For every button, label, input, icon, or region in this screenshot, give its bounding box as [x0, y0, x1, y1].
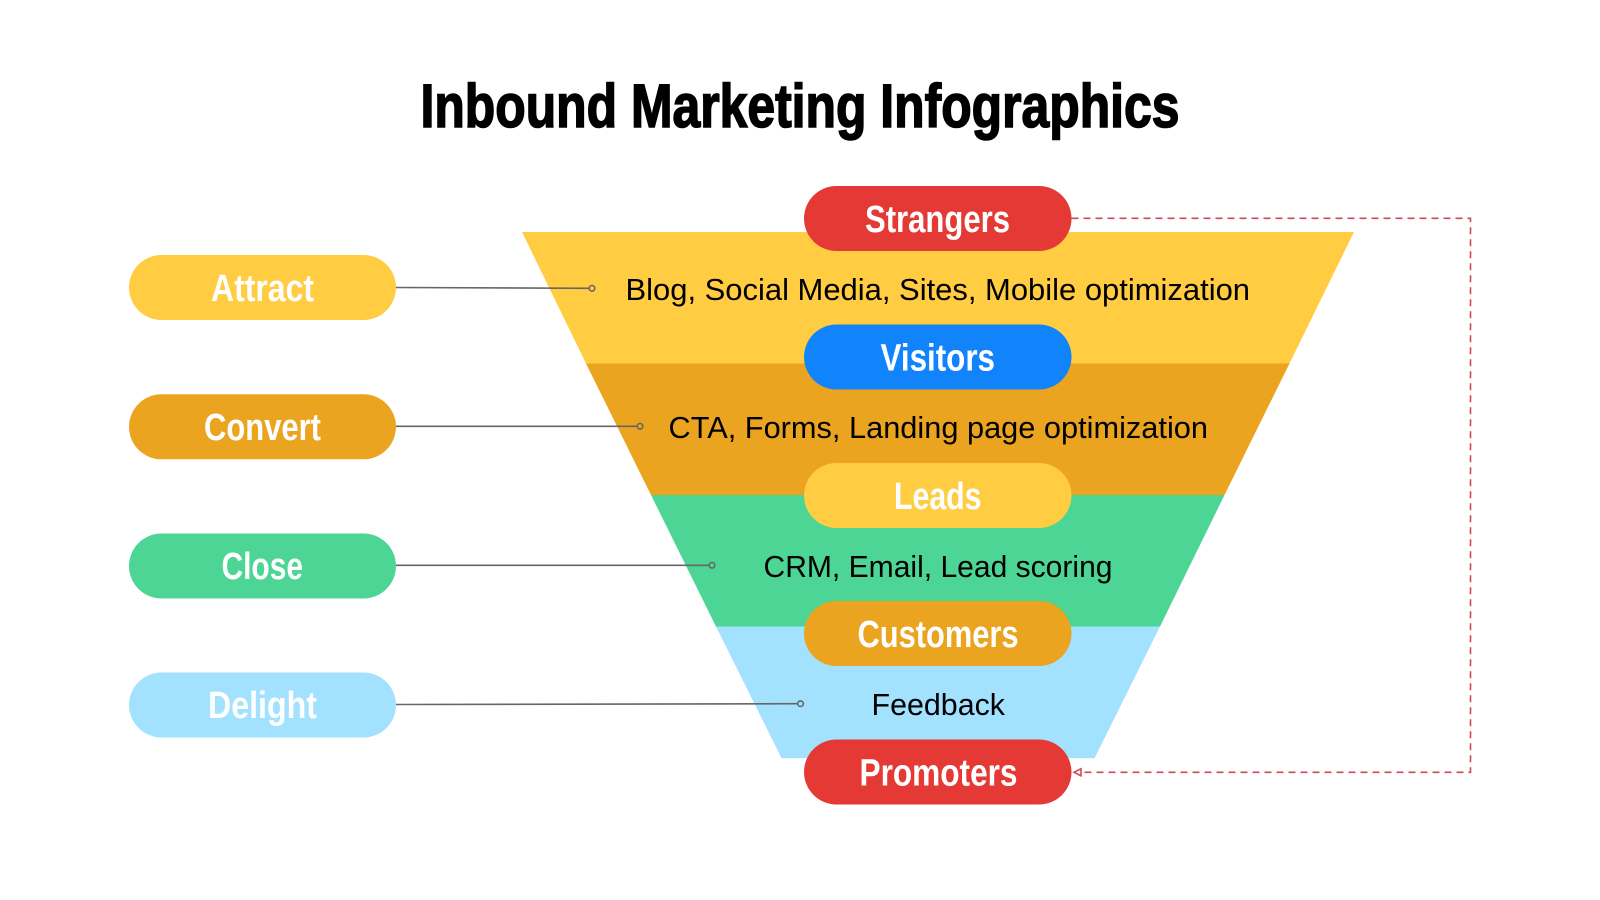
stage pill: customers — [804, 601, 1072, 666]
label pill: close — [129, 534, 396, 598]
funnel tier: attract — [522, 232, 1354, 364]
title: Inbound Marketing Infographics — [420, 72, 1180, 140]
funnel tier: close — [651, 495, 1224, 626]
connector: attract — [396, 286, 595, 291]
connector: close — [396, 562, 715, 568]
connector: delight — [396, 701, 803, 706]
funnel text: delight tools: Feedback — [872, 687, 1005, 722]
stage pill: visitors: Visitors — [880, 338, 995, 380]
funnel tier: delight — [716, 626, 1160, 758]
label pill: convert: Convert — [204, 407, 321, 449]
stage pill: customers: Customers — [858, 614, 1018, 656]
label pill: delight: Delight — [208, 685, 317, 727]
label pill: delight — [129, 672, 396, 738]
stage pill: promoters — [804, 740, 1072, 804]
stage pill: leads: Leads — [894, 476, 982, 518]
label pill: close: Close — [222, 546, 303, 588]
label pill: attract: Attract — [211, 268, 314, 310]
funnel text: convert tools: CTA, Forms, Landing page optimization — [668, 410, 1208, 445]
stage pill: strangers: Strangers — [865, 199, 1010, 241]
stage pill: visitors — [804, 324, 1072, 390]
dashed feedback arrow — [1072, 218, 1470, 776]
stage pill: strangers — [804, 186, 1072, 251]
stage pill: promoters: Promoters — [860, 752, 1018, 794]
label pill: convert — [129, 394, 396, 459]
funnel tier: convert — [586, 364, 1290, 495]
funnel text: attract tools: Blog, Social Media, Sites, Mobile optimization — [626, 272, 1250, 307]
connector: convert — [396, 424, 643, 429]
label pill: attract — [129, 255, 396, 320]
stage pill: leads — [804, 463, 1072, 528]
funnel text: close tools: CRM, Email, Lead scoring — [764, 549, 1112, 584]
funnel — [522, 232, 1354, 758]
